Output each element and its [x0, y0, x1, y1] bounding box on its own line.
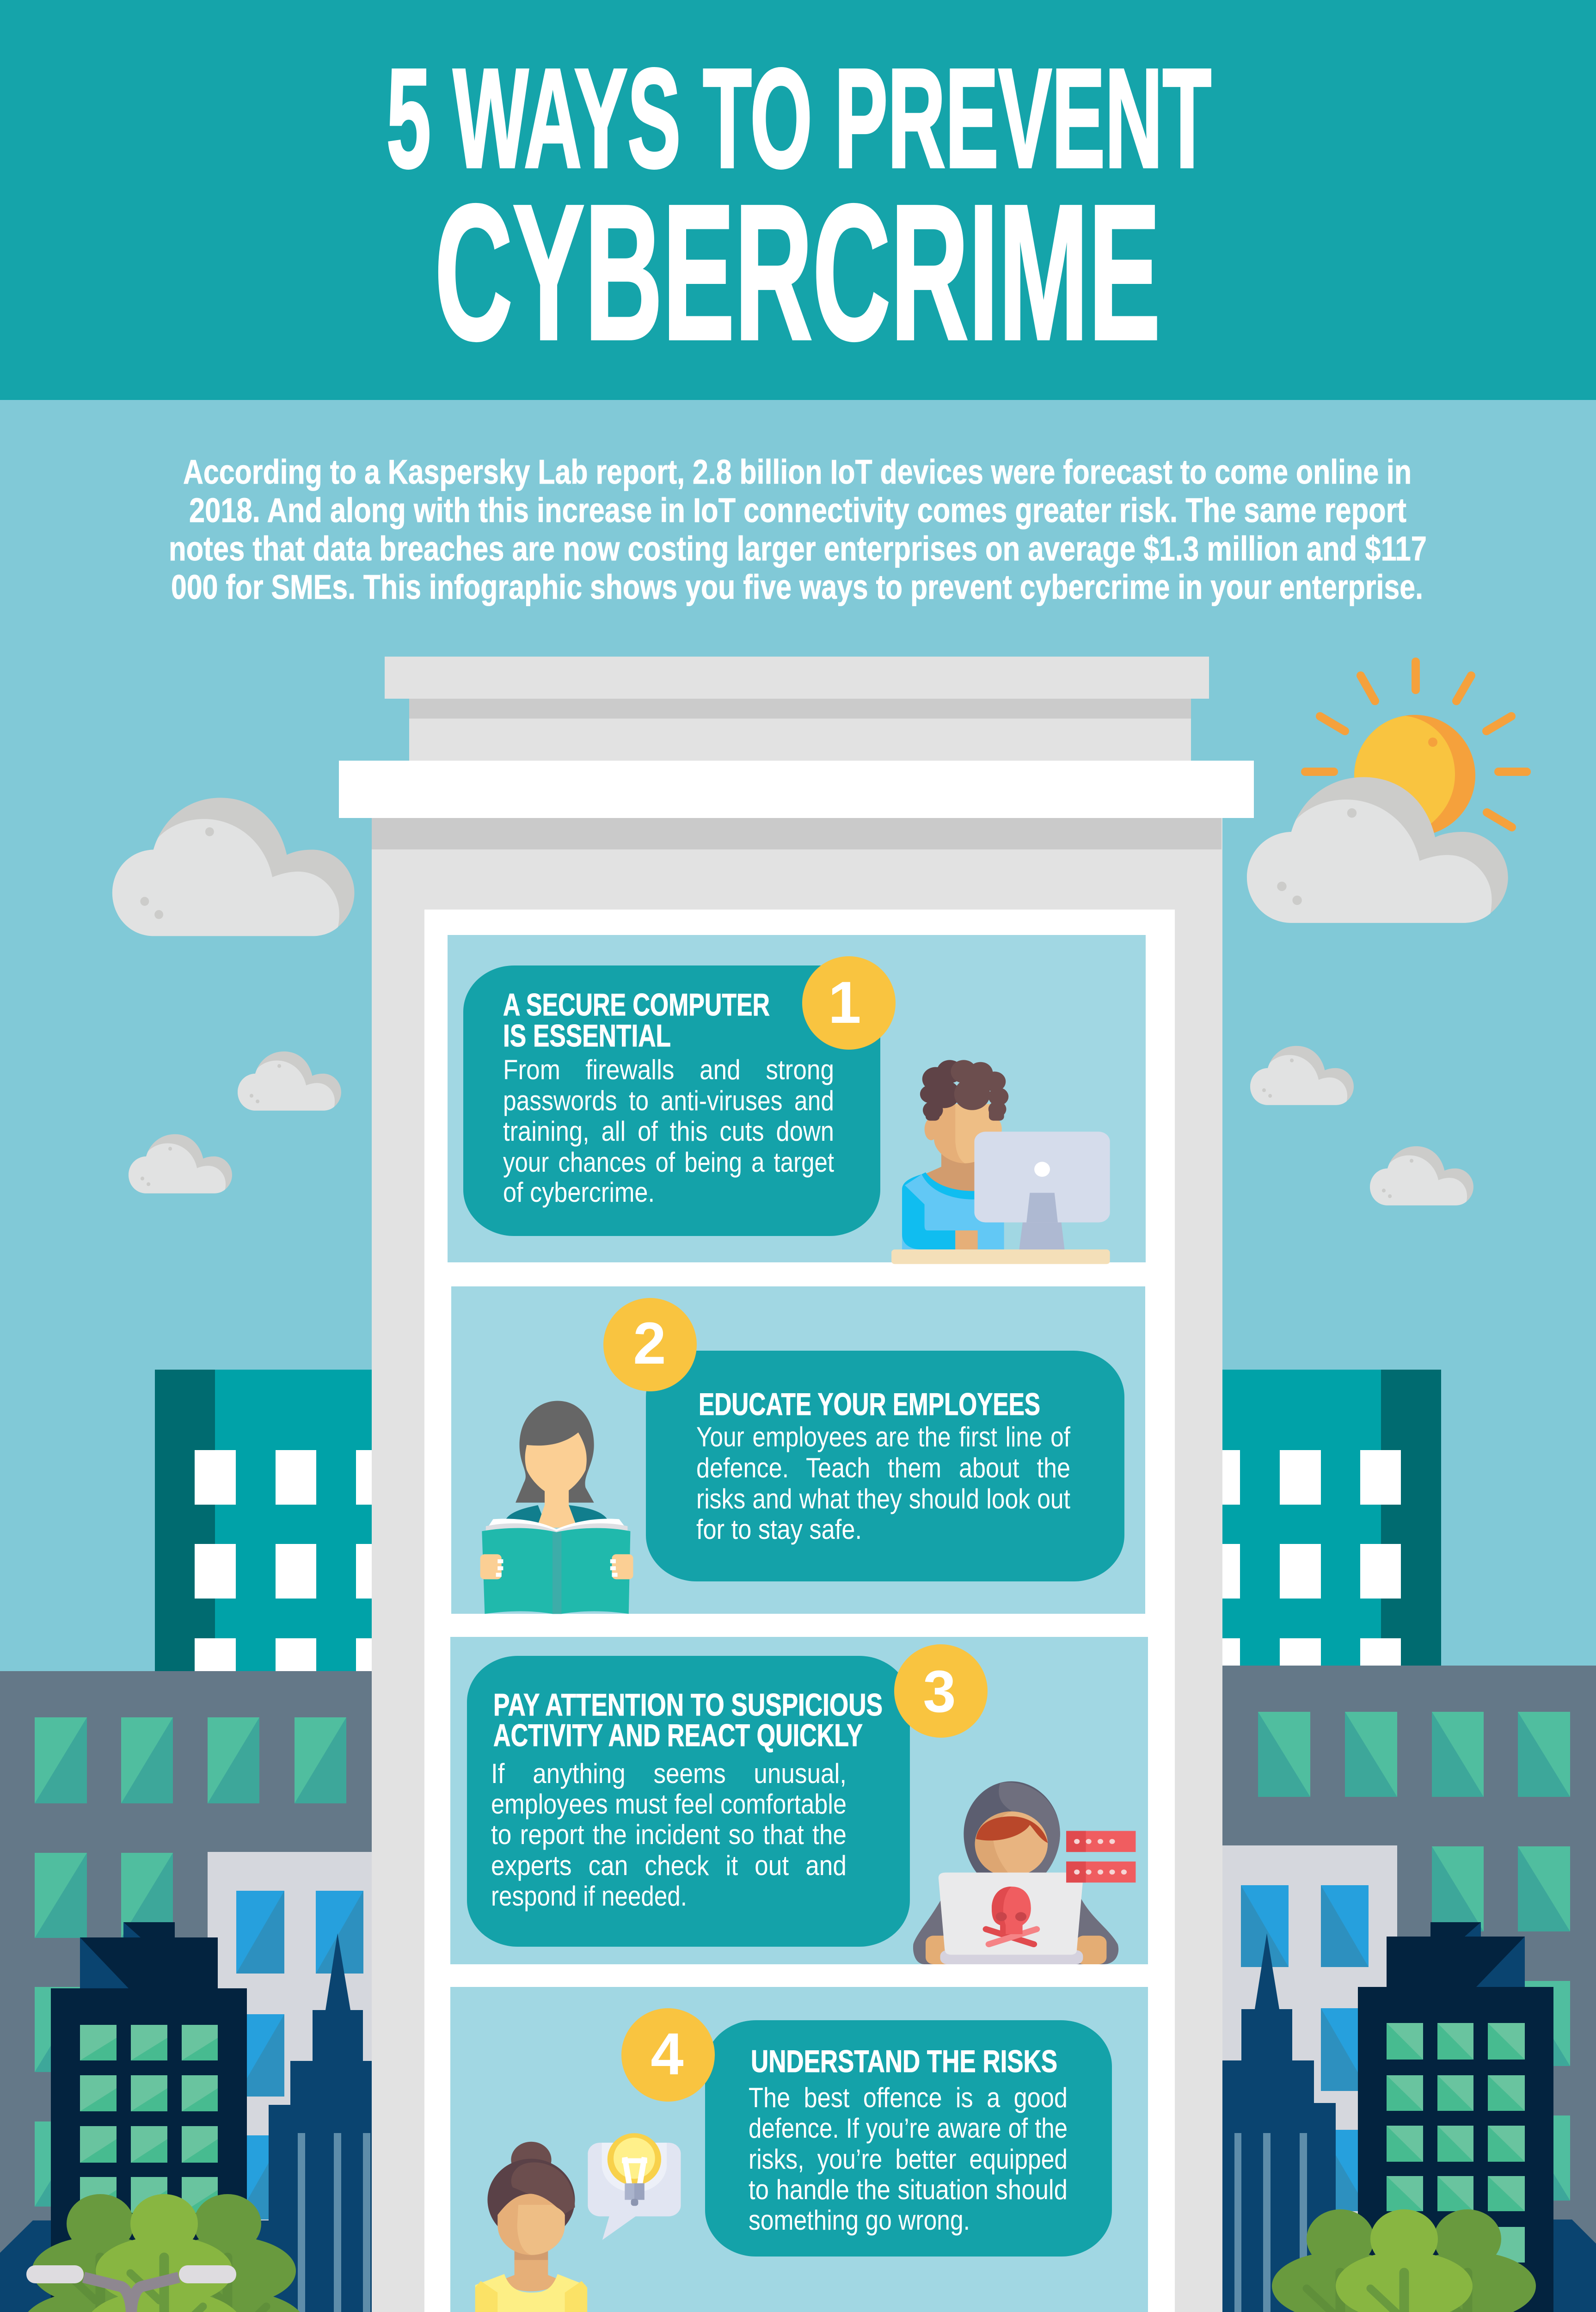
number badge 3 [894, 1644, 988, 1738]
heading 3 [493, 1687, 883, 1753]
panel: step 4 [450, 1987, 1148, 2312]
panel: step 3 [450, 1637, 1148, 1964]
tree: right dark [149, 2194, 306, 2312]
body text 3: to report the incident so that the [491, 1819, 847, 1850]
number badge 1: 1 [828, 970, 861, 1036]
body text 4: something go wrong. [749, 2205, 970, 2236]
sun disc [1354, 715, 1475, 836]
icon: sun and cloud [1247, 662, 1527, 923]
roof top [409, 699, 1191, 761]
right trees and bench [1262, 2209, 1546, 2312]
icon: woman reading book [480, 1401, 633, 1614]
heading 2: EDUCATE YOUR EMPLOYEES [699, 1387, 1040, 1422]
cloud: small left lower [129, 1134, 232, 1193]
icon: hacker with laptop [913, 1781, 1136, 1964]
small clouds right [1250, 1046, 1473, 1205]
intro text [169, 453, 1427, 606]
body text 3: employees must feel comfortable [491, 1789, 847, 1820]
tree: left dark [22, 2194, 178, 2312]
number badge 2 [603, 1298, 697, 1391]
text bubble 3 [467, 1656, 910, 1947]
number badge 4: 4 [651, 2021, 684, 2087]
body text 4 [749, 2082, 1068, 2236]
header band [0, 0, 1596, 400]
heading 3: PAY ATTENTION TO SUSPICIOUS [493, 1687, 883, 1722]
cloud: small right upper [1250, 1046, 1354, 1105]
heading 4: UNDERSTAND THE RISKS [751, 2044, 1057, 2079]
heading 1: A SECURE COMPUTER [503, 987, 770, 1022]
body text 2 [696, 1421, 1070, 1545]
light building left [208, 1852, 372, 2222]
body text 2: defence. Teach them about the [696, 1452, 1070, 1483]
cloud: small left upper [238, 1051, 341, 1111]
panel: step 1 [448, 935, 1146, 1264]
body text 1: passwords to anti-viruses and [503, 1085, 834, 1116]
body text 1: From firewalls and strong [503, 1054, 834, 1085]
body text 2: risks and what they should look out [696, 1483, 1070, 1514]
tree: centre light [86, 2194, 242, 2312]
small clouds left [112, 798, 354, 1193]
teal building right [1222, 1370, 1441, 1666]
body text 2: Your employees are the first line of [696, 1421, 1070, 1452]
body text 3: experts can check it out and [491, 1850, 847, 1881]
body text 2: for to stay safe. [696, 1514, 862, 1545]
body text 3: If anything seems unusual, [491, 1758, 847, 1789]
tree: right dark right group [1389, 2209, 1546, 2312]
tree: left dark right group [1262, 2209, 1418, 2312]
text bubble 1 [463, 965, 880, 1236]
dark tower right [1358, 1922, 1553, 2312]
grey building right [1222, 1666, 1596, 2267]
skyline tower left [269, 1933, 372, 2312]
number badge 4 [621, 2008, 715, 2102]
icon: woman with idea bulb [475, 2133, 681, 2312]
white inner column [424, 910, 1175, 2312]
panel: step 2 [451, 1286, 1145, 1614]
skyline tower right [1222, 1933, 1336, 2312]
title [387, 39, 1211, 380]
navy ground left [0, 2220, 372, 2312]
light building right [1222, 1845, 1397, 2222]
sun rays [1305, 662, 1527, 827]
body text 1: of cybercrime. [503, 1177, 655, 1208]
icon: man at computer [891, 1060, 1110, 1264]
number badge 3: 3 [923, 1659, 956, 1725]
building [339, 657, 1254, 2312]
body text 4: defence. If you’re aware of the [749, 2113, 1068, 2144]
left trees and lamp [22, 2194, 306, 2312]
number badge 1 [802, 956, 896, 1050]
left city buildings [0, 1370, 372, 2312]
cloud: large right [1247, 777, 1508, 923]
body text 1 [503, 1054, 834, 1208]
text bubble 2 [646, 1351, 1124, 1581]
tree: centre light right group [1326, 2209, 1482, 2312]
teal building left [155, 1370, 372, 1671]
text bubble 4 [705, 2020, 1112, 2257]
heading 1 [503, 987, 770, 1053]
heading 1: IS ESSENTIAL [503, 1018, 671, 1053]
building body [372, 818, 1222, 2312]
body text 3: respond if needed. [491, 1881, 687, 1912]
body text 4: The best offence is a good [749, 2082, 1068, 2113]
grey building left [0, 1671, 372, 2272]
body text 3 [491, 1758, 847, 1912]
cloud: large left [112, 798, 354, 936]
street lamp [26, 2265, 260, 2312]
body text 4: risks, you’re better equipped [749, 2144, 1068, 2175]
heading 3: ACTIVITY AND REACT QUICKLY [493, 1718, 863, 1753]
navy ground right [1222, 2220, 1596, 2312]
right city buildings [1222, 1370, 1596, 2312]
body text 1: training, all of this cuts down [503, 1116, 834, 1147]
cloud: small right lower [1370, 1146, 1473, 1205]
number badge 2: 2 [633, 1310, 666, 1377]
body text 4: to handle the situation should [749, 2174, 1068, 2205]
body text 1: your chances of being a target [503, 1147, 834, 1178]
dark tower left [51, 1922, 247, 2312]
